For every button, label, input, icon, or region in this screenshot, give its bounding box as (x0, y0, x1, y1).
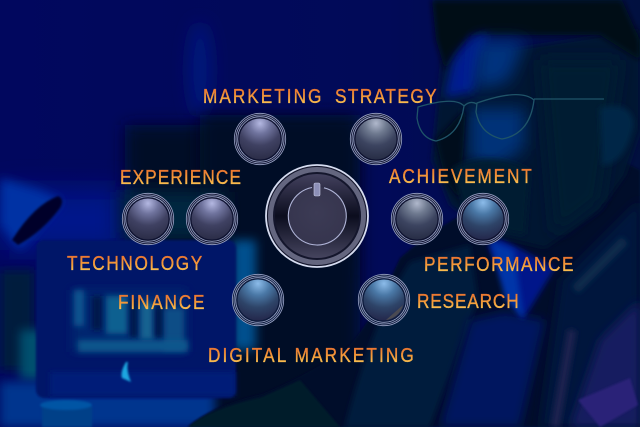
button: bottom right (Research) (358, 274, 410, 326)
label: achievement: ACHIEVEMENT (389, 166, 532, 188)
button: top right (Strategy) (350, 113, 402, 165)
label: research: RESEARCH (417, 291, 519, 313)
background lamp (0, 178, 62, 250)
label: marketing: MARKETING (203, 86, 321, 108)
background person: head and glasses (417, 0, 640, 248)
label: digital marketing: DIGITAL MARKETING (208, 345, 414, 367)
button: right outer (Performance) (457, 193, 509, 245)
label: strategy: STRATEGY (335, 86, 437, 108)
button: left outer (Experience) (122, 193, 174, 245)
label: performance: PERFORMANCE (424, 254, 574, 276)
button: left inner (Technology) (186, 193, 238, 245)
button: bottom left (Finance) (232, 274, 284, 326)
labels (67, 86, 574, 367)
background person: suit and shirt (188, 150, 640, 427)
label: finance: FINANCE (118, 292, 205, 314)
label: technology: TECHNOLOGY (67, 253, 203, 275)
background cup (40, 400, 92, 427)
background laptop (36, 240, 236, 398)
button: top left (Marketing) (234, 113, 286, 165)
button: right inner (Achievement) (391, 193, 443, 245)
central dial knob (266, 165, 368, 267)
label: experience: EXPERIENCE (120, 167, 241, 189)
